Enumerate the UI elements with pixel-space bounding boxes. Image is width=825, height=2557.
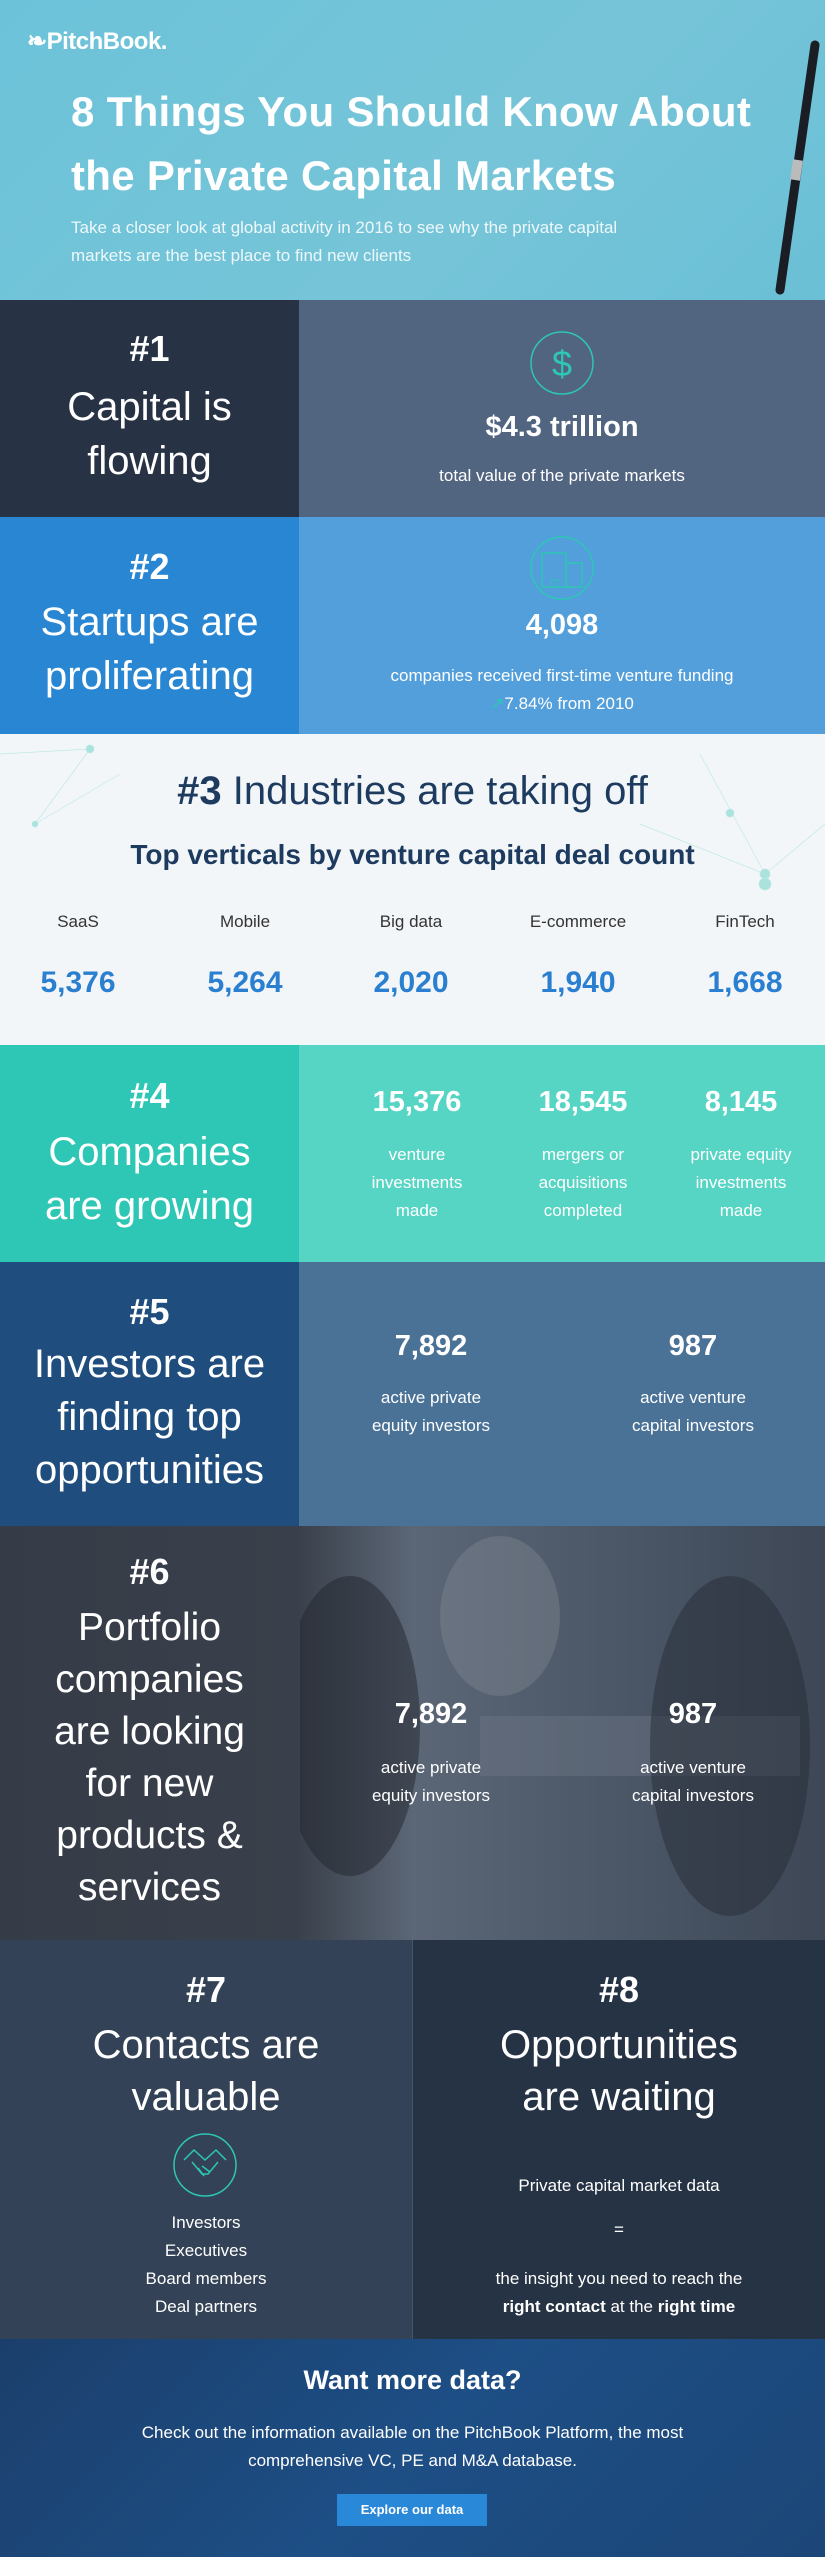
panel: #8 opportunities <box>413 1940 825 2339</box>
panel: #6 portfolio: active private <box>381 1758 481 1777</box>
heading #5: Investors are <box>34 1342 265 1386</box>
icon: dollar: $ <box>552 343 572 384</box>
heading #6 <box>54 1551 245 1909</box>
panel: #4 companies: made <box>396 1201 438 1220</box>
title: the Private Capital Markets <box>71 152 616 199</box>
title: 8 Things You Should Know About <box>71 88 751 135</box>
verticals: E-commerce <box>530 912 626 931</box>
panel: #4 companies: private equity <box>690 1145 792 1164</box>
header panel <box>0 0 825 300</box>
list: Investors <box>172 2213 240 2232</box>
list: Deal partners <box>155 2297 257 2316</box>
heading #6: products & <box>56 1814 243 1857</box>
heading #6: Portfolio <box>78 1606 221 1649</box>
heading #5: #5 <box>129 1291 170 1332</box>
button <box>337 2494 487 2526</box>
list: Board members <box>146 2269 266 2288</box>
panel: #4 companies: venture <box>389 1145 445 1164</box>
heading #6: #6 <box>129 1551 170 1592</box>
button: Explore our data <box>361 2502 463 2517</box>
subtitle <box>71 218 617 265</box>
panel: #5 investors: capital investors <box>632 1416 754 1435</box>
stats: 7,892 <box>395 1330 467 1362</box>
heading #5 <box>0 1262 299 1526</box>
panel: #7 contacts <box>0 1940 413 2339</box>
panel: #6 portfolio <box>0 1526 825 1940</box>
verticals: 1,668 <box>707 966 783 999</box>
panel: #6 portfolio: equity investors <box>372 1786 490 1805</box>
heading #2: Startups are <box>41 600 258 644</box>
panel: #8 opportunities: #8 <box>599 1969 639 2010</box>
logo: ❧PitchBook. <box>27 28 167 55</box>
panel: #8 opportunities: the insight you need to reach the <box>496 2269 742 2288</box>
panel: #7 contacts: Contacts are <box>93 2023 319 2067</box>
heading #6: are looking <box>54 1710 245 1753</box>
panel: #1 capital: total value of the private markets <box>439 466 685 485</box>
panel: #2 startups <box>0 517 825 734</box>
list <box>146 2213 266 2316</box>
heading #1 <box>0 300 299 517</box>
heading #6: services <box>78 1866 221 1909</box>
panel: #7 contacts: valuable <box>131 2075 280 2119</box>
heading #2: #2 <box>129 546 170 587</box>
stats: 15,376 <box>373 1086 461 1118</box>
panel: #3 industries <box>0 734 825 1045</box>
panel: #5 investors: 987 <box>669 1330 717 1362</box>
heading #1: #1 <box>129 328 170 369</box>
heading #3: #3 Industries are taking off <box>177 769 648 813</box>
verticals: SaaS <box>57 912 99 931</box>
panel: #7 contacts: #7 <box>186 1969 226 2010</box>
panel: #8 opportunities: Opportunities <box>500 2023 738 2067</box>
panel: #5 investors: active venture <box>640 1388 746 1407</box>
heading #6: companies <box>55 1658 244 1701</box>
icon: pen <box>776 40 820 294</box>
text: Private capital market data <box>518 2176 720 2195</box>
panel: #6 portfolio: capital investors <box>632 1786 754 1805</box>
footer <box>0 2339 825 2557</box>
heading #5: opportunities <box>35 1448 264 1492</box>
stat: $4.3 trillion <box>485 411 639 443</box>
heading #1: flowing <box>87 439 212 483</box>
panel: #4 companies: mergers or <box>542 1145 624 1164</box>
verticals: Big data <box>380 912 442 931</box>
panel: #4 companies: investments <box>372 1173 462 1192</box>
subtitle: Take a closer look at global activity in 2016 to see why the private capital <box>71 218 617 237</box>
panel: #8 opportunities: right contact at the right time <box>503 2297 735 2316</box>
heading #4: #4 <box>129 1075 170 1116</box>
verticals: 5,264 <box>207 966 283 999</box>
stats: 7,892 <box>395 1698 467 1730</box>
icon: dollar <box>530 331 594 395</box>
heading #2: proliferating <box>45 654 254 698</box>
panel: #4 companies: made <box>720 1201 762 1220</box>
panel: #5 investors: active private <box>381 1388 481 1407</box>
stat: 4,098 <box>526 609 598 641</box>
heading #4: Companies <box>48 1130 251 1174</box>
network background <box>0 744 825 890</box>
title <box>71 88 751 199</box>
verticals: 1,940 <box>540 966 616 999</box>
panel: #4 companies: investments <box>696 1173 786 1192</box>
verticals: Mobile <box>220 912 270 931</box>
footer heading: Want more data? <box>303 2365 522 2395</box>
heading #5: finding top <box>57 1395 242 1439</box>
panel: #5 investors <box>0 1262 825 1526</box>
subtitle: markets are the best place to find new clients <box>71 246 411 265</box>
panel: #8 opportunities: are waiting <box>522 2075 716 2119</box>
panel: #4 companies <box>0 1045 825 1262</box>
list: Executives <box>165 2241 247 2260</box>
panel: #4 companies: 8,145 <box>705 1086 777 1118</box>
panel: #4 companies: completed <box>544 1201 622 1220</box>
panel: #6 portfolio: 987 <box>669 1698 717 1730</box>
heading #1: Capital is <box>67 385 232 429</box>
panel: #8 opportunities: = <box>614 2220 624 2239</box>
verticals: 5,376 <box>40 966 116 999</box>
icon: handshake <box>173 2133 237 2197</box>
panel: #4 companies: acquisitions <box>539 1173 627 1192</box>
panel: #1 capital <box>0 300 825 517</box>
heading #4: are growing <box>45 1184 254 1228</box>
footer text <box>142 2423 684 2470</box>
panel: #4 companies: 18,545 <box>539 1086 627 1118</box>
verticals: FinTech <box>715 912 775 931</box>
panel: #2 startups: companies received first-time venture funding <box>390 666 734 685</box>
heading #4 <box>0 1045 299 1262</box>
subheading: Top verticals by venture capital deal count <box>130 839 695 870</box>
verticals: 2,020 <box>373 966 449 999</box>
photo approximation <box>300 1536 810 1916</box>
panel: #6 portfolio: active venture <box>640 1758 746 1777</box>
verticals <box>40 912 783 999</box>
icon: building <box>530 536 594 600</box>
heading #2 <box>0 517 299 734</box>
footer text: comprehensive VC, PE and M&A database. <box>248 2451 577 2470</box>
footer text: Check out the information available on the PitchBook Platform, the most <box>142 2423 683 2442</box>
heading #6: for new <box>86 1762 213 1805</box>
panel: #2 startups: ↗7.84% from 2010 <box>490 694 634 713</box>
panel: #5 investors: equity investors <box>372 1416 490 1435</box>
